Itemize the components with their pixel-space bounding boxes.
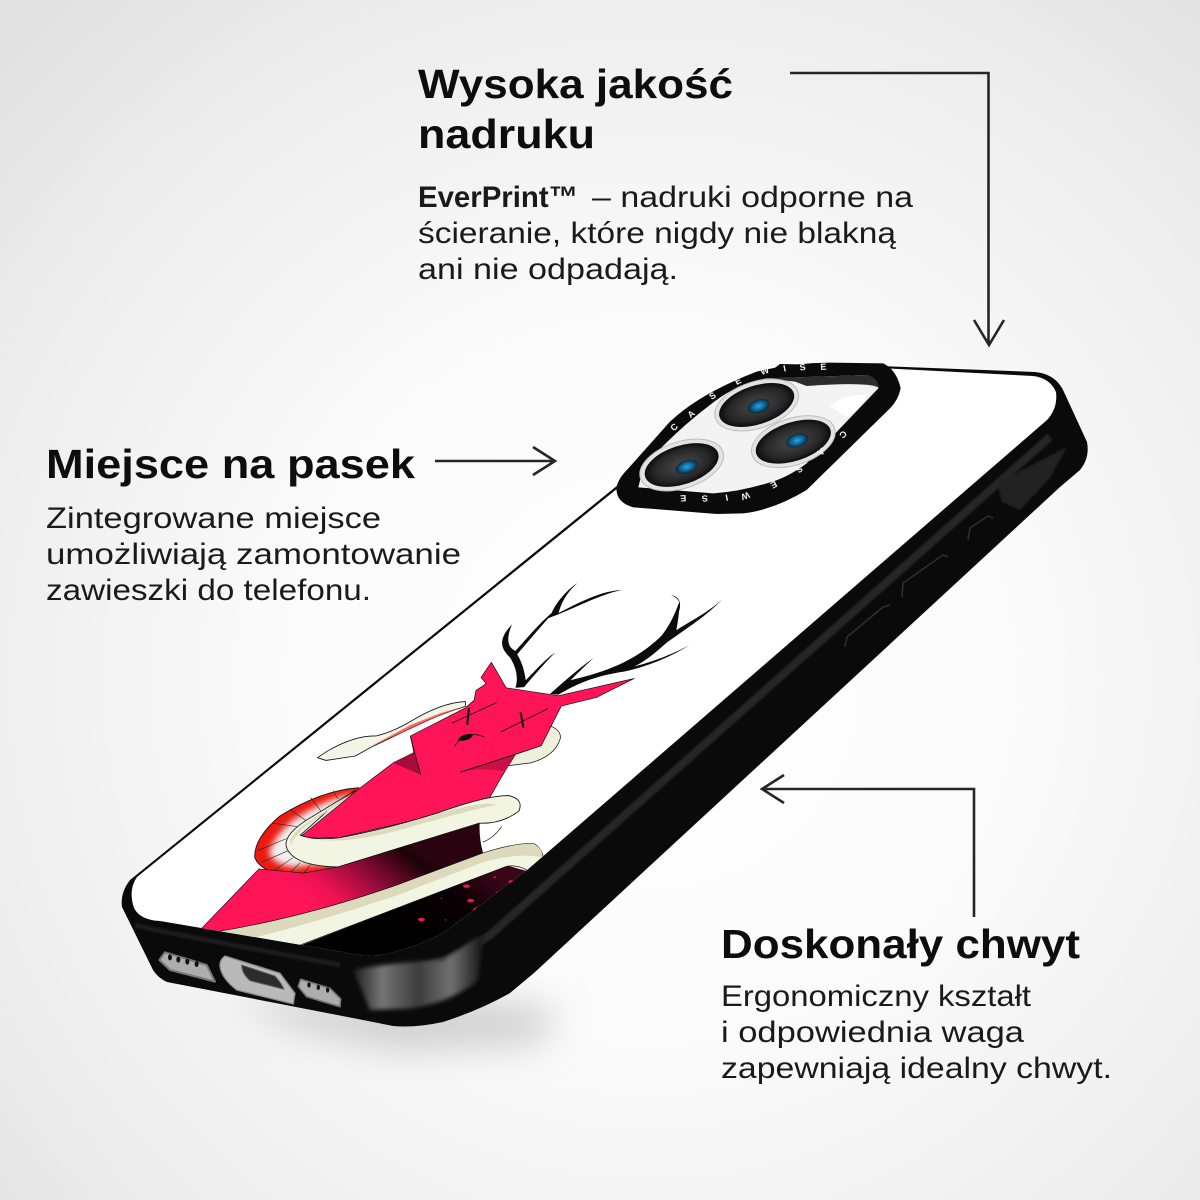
- body text: ani nie odpadają.: [418, 253, 678, 286]
- dark base with splatter: [302, 866, 526, 956]
- heading: Wysoka jakość: [418, 61, 733, 107]
- red belly coil: [255, 788, 362, 875]
- brand lettering: E: [733, 375, 743, 387]
- arrow: to strap mount: [435, 447, 555, 475]
- snake head: [317, 702, 466, 760]
- brand lettering: E: [680, 493, 687, 503]
- belly white inner: [269, 795, 355, 867]
- chest gradient: [195, 823, 483, 935]
- brand lettering: [668, 362, 849, 504]
- callout: grip: [721, 775, 1112, 1085]
- eye: [458, 734, 473, 741]
- mute switch sheen: [997, 447, 1067, 510]
- side band: [135, 437, 1050, 970]
- antler left: [502, 583, 622, 688]
- neck shadow triangle: [393, 753, 421, 775]
- brand lettering: S: [701, 493, 708, 504]
- eyes and scars: [452, 703, 548, 746]
- main snake coil: [286, 790, 520, 867]
- brand lettering: W: [759, 365, 771, 377]
- body text: Ergonomiczny kształt: [721, 980, 1032, 1013]
- ports: [159, 952, 341, 1007]
- case frame: [122, 364, 1088, 1026]
- back snake coil behind neck: [509, 725, 560, 766]
- brand lettering: C: [837, 429, 849, 441]
- lower snake coil: [220, 843, 544, 945]
- mouth: [464, 754, 516, 772]
- callout: print quality: [418, 61, 1004, 345]
- snake belly stripe: [371, 706, 466, 746]
- speaker grille left: [159, 952, 215, 982]
- arrow: to back print: [790, 73, 1004, 345]
- body text: – nadruki odporne na: [592, 181, 913, 214]
- lenses: [633, 369, 842, 501]
- heading: Doskonały chwyt: [721, 921, 1080, 967]
- brand lettering: A: [686, 408, 697, 420]
- callout: strap mount: [46, 441, 555, 607]
- body text: [721, 980, 1112, 1085]
- brand lettering: W: [739, 490, 751, 502]
- body text: zapewniają idealny chwyt.: [721, 1052, 1112, 1085]
- glass inner shadow: [767, 375, 878, 387]
- brand lettering: S: [707, 390, 718, 402]
- brand lettering: S: [799, 362, 806, 373]
- side buttons: [845, 516, 993, 647]
- brand lettering: S: [794, 463, 805, 475]
- corner bumper highlight: [353, 933, 483, 1010]
- coil shading: [290, 793, 497, 846]
- artwork: deer and snake: [195, 583, 722, 970]
- brand lettering: E: [820, 362, 827, 372]
- head and neck: [300, 662, 634, 838]
- brand lettering: A: [815, 446, 827, 458]
- body text: Zintegrowane miejsce: [46, 502, 381, 535]
- body text: [46, 502, 461, 607]
- lower coil shading: [220, 844, 542, 938]
- body text: i odpowiednia waga: [721, 1016, 1024, 1049]
- body text: zawieszki do telefonu.: [46, 574, 371, 607]
- antler right: [550, 595, 722, 695]
- brand lettering: E: [769, 479, 779, 491]
- panel: phone case: [122, 362, 1088, 1052]
- brand lettering: I: [782, 363, 787, 374]
- arrow: to side grip: [762, 775, 974, 917]
- screen: printed white back: [132, 368, 1056, 956]
- charging port: [220, 956, 295, 1004]
- heading: [418, 61, 733, 157]
- body text: umożliwiają zamontowanie: [46, 538, 461, 571]
- body text: [418, 181, 913, 286]
- phone shadow: [230, 1000, 560, 1052]
- camera glass: [638, 375, 878, 493]
- heading: Miejsce na pasek: [46, 441, 415, 487]
- belly scales: [257, 790, 338, 875]
- brand lettering: I: [724, 492, 729, 503]
- heading: nadruku: [418, 111, 595, 157]
- body text: EverPrint™: [418, 181, 578, 214]
- body text: ścieranie, które nigdy nie blakną: [418, 217, 896, 250]
- camera bump: [616, 362, 901, 514]
- brand lettering: C: [668, 421, 680, 433]
- speaker grille right: [298, 979, 341, 1007]
